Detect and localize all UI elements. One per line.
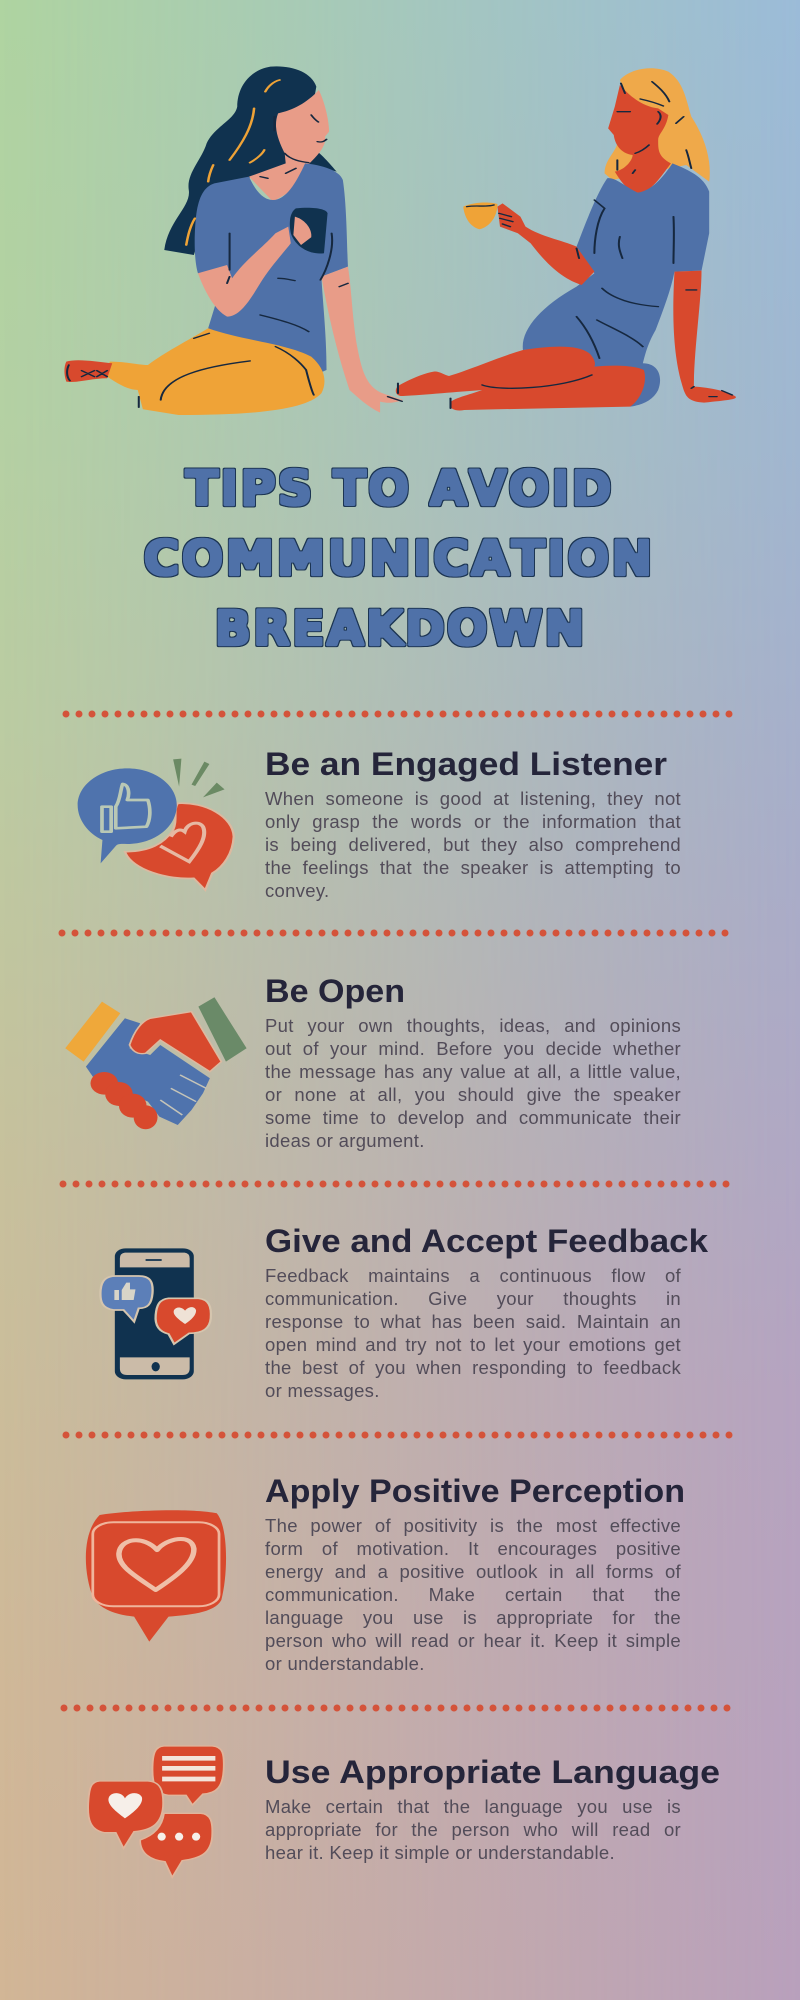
icon: like and heart speech bubbles — [78, 759, 234, 890]
text block: feedback: response to what has been said. Maintain an — [265, 1311, 681, 1332]
title: TIPS TO AVOID — [186, 461, 614, 517]
text block: appropriate language — [265, 1796, 681, 1863]
heading: Use Appropriate Language: Use Appropriate Language — [265, 1754, 720, 1790]
title — [144, 461, 654, 657]
text block: engaged listener: convey. — [265, 880, 329, 901]
icon: phone with reactions — [100, 1248, 211, 1379]
icon: three speech bubbles — [88, 1746, 224, 1877]
text block: engaged listener: the feelings that the speaker is attempting to — [265, 857, 681, 878]
text block: feedback: or messages. — [265, 1380, 380, 1401]
dotted dividers — [62, 714, 735, 1708]
illustration: two women talking — [64, 66, 736, 415]
text block: positive perception: communication. Make certain that the — [265, 1584, 681, 1605]
text block: be open: ideas or argument. — [265, 1130, 425, 1151]
text block: feedback: open mind and try not to let your emotions get — [265, 1334, 681, 1355]
text block: be open: the message has any value at all, a little value, — [265, 1061, 681, 1082]
text block: be open: out of your mind. Before you decide whether — [265, 1038, 681, 1059]
heading: Be an Engaged Listener: Be an Engaged Listener — [265, 746, 667, 782]
text block: engaged listener — [265, 788, 681, 901]
title: BREAKDOWN — [214, 601, 586, 657]
text block: positive perception: person who will read or hear it. Keep it simple — [265, 1630, 681, 1651]
text block: positive perception: form of motivation. It encourages positive — [265, 1538, 681, 1559]
text block: feedback: the best of you when responding to feedback — [265, 1357, 681, 1378]
text block: engaged listener: When someone is good at listening, they not — [265, 788, 681, 809]
text block: feedback — [265, 1265, 681, 1401]
text block: be open: some time to develop and communicate their — [265, 1107, 681, 1128]
text block: be open: Put your own thoughts, ideas, and opinions — [265, 1015, 681, 1036]
text block: be open — [265, 1015, 681, 1151]
left woman — [64, 66, 403, 415]
right woman — [396, 68, 736, 410]
text block: positive perception: The power of positivity is the most effective — [265, 1515, 681, 1536]
text block: positive perception: energy and a positive outlook in all forms of — [265, 1561, 681, 1582]
text block: appropriate language: Make certain that the language you use is — [265, 1796, 681, 1817]
text block: feedback: Feedback maintains a continuous flow of — [265, 1265, 681, 1286]
heading: Give and Accept Feedback: Give and Accept Feedback — [265, 1223, 708, 1259]
text block: positive perception: language you use is appropriate for the — [265, 1607, 681, 1628]
text block: appropriate language: hear it. Keep it simple or understandable. — [265, 1842, 615, 1863]
heading: Apply Positive Perception: Apply Positive Perception — [265, 1473, 685, 1509]
text block: feedback: communication. Give your thoughts in — [265, 1288, 681, 1309]
text block: appropriate language: appropriate for the person who will read or — [265, 1819, 681, 1840]
heading: Be Open: Be Open — [265, 973, 405, 1009]
text block: positive perception — [265, 1515, 681, 1674]
title: COMMUNICATION — [144, 531, 654, 587]
icon: heart speech bubble — [86, 1510, 226, 1642]
icon: handshake — [65, 997, 247, 1129]
text block: positive perception: or understandable. — [265, 1653, 425, 1674]
text block: engaged listener: only grasp the words or the information that — [265, 811, 681, 832]
text block: be open: or none at all, you should give the speaker — [265, 1084, 681, 1105]
text block: engaged listener: is being delivered, but they also comprehend — [265, 834, 681, 855]
